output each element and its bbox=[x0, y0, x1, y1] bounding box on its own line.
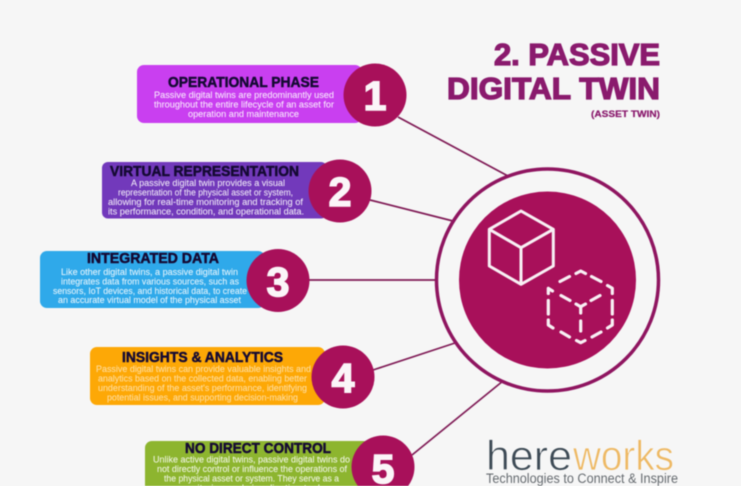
body: no direct control: Unlike active digital twins, passive digital twins do bbox=[153, 454, 350, 464]
logo: hereworks bbox=[486, 432, 678, 486]
number badge 2 bbox=[308, 160, 372, 222]
body: integrated data: an accurate virtual model of the physical asset bbox=[58, 295, 242, 305]
body: virtual representation: representation of the physical asset or system, bbox=[118, 188, 293, 198]
body: operational phase bbox=[154, 90, 334, 119]
title bbox=[447, 37, 660, 119]
body: operational phase: throughout the entire lifecycle of an asset for bbox=[154, 100, 334, 110]
body: integrated data: Like other digital twins, a passive digital twin bbox=[61, 267, 238, 277]
number badge 4: 4 bbox=[332, 355, 355, 401]
body: insights and analytics bbox=[96, 364, 311, 402]
number badge 5 bbox=[352, 436, 414, 486]
title: (ASSET TWIN) bbox=[591, 109, 660, 119]
body: operational phase: operation and maintenance bbox=[188, 109, 299, 119]
body: virtual representation: allowing for real-time monitoring and tracking of bbox=[108, 197, 304, 207]
body: no direct control: the physical asset or system. They serve as a bbox=[164, 474, 339, 484]
title: 2. PASSIVE bbox=[494, 37, 660, 72]
number badge 1: 1 bbox=[364, 73, 386, 119]
panel: operational phase bbox=[137, 64, 406, 126]
panel: virtual representation bbox=[102, 160, 372, 222]
panel: insights and analytics bbox=[90, 346, 374, 408]
connector lines bbox=[309, 117, 508, 455]
number badge 1 bbox=[344, 64, 406, 126]
body: no direct control bbox=[153, 454, 350, 486]
body: integrated data: sensors, IoT devices, and historical data, to create bbox=[53, 286, 247, 296]
central emblem bbox=[436, 169, 658, 391]
number badge 3 bbox=[246, 249, 310, 312]
body: integrated data bbox=[53, 267, 247, 305]
body: insights and analytics: analytics based on the collected data, enabling better bbox=[98, 374, 307, 384]
number badge 4 bbox=[312, 346, 374, 408]
number badge 2: 2 bbox=[329, 169, 351, 215]
heading: no direct control: NO DIRECT CONTROL bbox=[185, 441, 331, 457]
body: virtual representation: its performance, condition, and operational data. bbox=[108, 206, 304, 216]
title: DIGITAL TWIN bbox=[447, 71, 660, 106]
heading: insights and analytics: INSIGHTS & ANALYTICS bbox=[122, 350, 283, 366]
icon: dashed cube bbox=[548, 271, 612, 343]
heading: virtual representation: VIRTUAL REPRESENTATION bbox=[110, 164, 299, 180]
heading: operational phase: OPERATIONAL PHASE bbox=[168, 75, 319, 91]
panel: integrated data bbox=[40, 249, 310, 312]
body: virtual representation bbox=[108, 178, 304, 216]
body: integrated data: integrates data from various sources, such as bbox=[61, 276, 240, 286]
number badge 3: 3 bbox=[267, 259, 289, 305]
body: virtual representation: A passive digital twin provides a visual bbox=[131, 178, 285, 188]
panel: no direct control bbox=[145, 436, 414, 486]
body: insights and analytics: potential issues, and supporting decision-making bbox=[107, 392, 298, 402]
body: insights and analytics: Passive digital twins can provide valuable insights and bbox=[96, 364, 311, 374]
icon: solid cube bbox=[489, 211, 553, 284]
logo: hereworks: here bbox=[486, 432, 572, 479]
heading: integrated data: INTEGRATED DATA bbox=[87, 251, 220, 267]
logo tagline: Technologies to Connect & Inspire bbox=[486, 471, 678, 486]
logo: hereworks: works bbox=[572, 432, 674, 479]
body: insights and analytics: understanding of the asset's performance, identifying bbox=[98, 383, 307, 393]
body: no direct control: not directly control or influence the operations of bbox=[157, 464, 348, 474]
body: operational phase: Passive digital twins are predominantly used bbox=[154, 90, 334, 100]
